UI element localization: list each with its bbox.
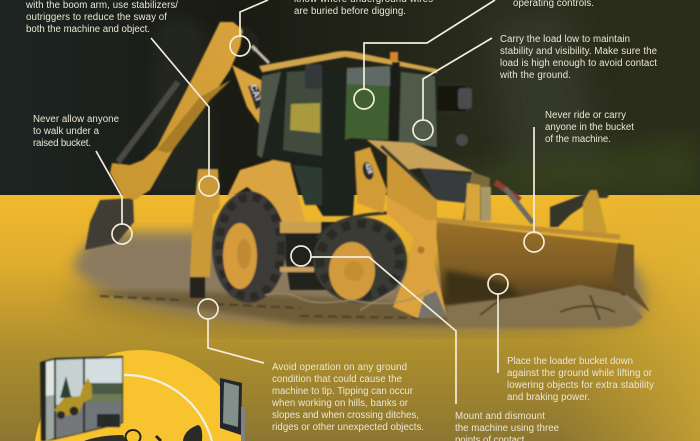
front fender panel <box>355 147 387 213</box>
left cab window <box>283 70 322 156</box>
callout: carry load low: load is high enough to avoid contact <box>500 58 657 69</box>
simulator screens <box>40 356 123 441</box>
callout: boom arm stabilizers: with the boom arm, use stabilizers/ <box>25 0 178 11</box>
engine hood <box>367 140 475 172</box>
cab body <box>257 70 437 216</box>
callout: underground wires <box>294 0 433 17</box>
simulator lever <box>156 436 161 441</box>
model badge: 428 <box>363 162 374 175</box>
cab roof <box>259 51 437 73</box>
callout: loader bucket down: Place the loader bucket down <box>507 356 633 367</box>
model badge <box>361 161 375 181</box>
callout: never ride in bucket <box>545 110 634 145</box>
hydraulic ram red <box>495 182 520 200</box>
front fender arc <box>317 213 387 238</box>
side panel <box>387 153 437 240</box>
callout: avoid tipping <box>271 362 424 433</box>
simulator steering wheel <box>126 430 140 441</box>
bucket shadow <box>445 270 520 305</box>
middle screen <box>56 359 83 438</box>
callout: loader bucket down: lowering objects for extra stability <box>507 380 654 391</box>
dark background band <box>414 0 700 195</box>
callout: never ride in bucket: of the machine. <box>545 134 611 145</box>
callout markers <box>112 36 544 319</box>
door lower window <box>293 165 322 205</box>
callout: never ride in bucket: Never ride or carry <box>545 110 626 121</box>
front tire <box>313 217 407 303</box>
simulator side monitor <box>220 378 245 441</box>
simulator console <box>84 435 126 441</box>
callout: never ride in bucket: anyone in the bucket <box>545 122 634 133</box>
callout: underground wires: are buried before digging. <box>294 6 406 17</box>
backhoe loader <box>85 22 650 326</box>
CAT mark: CAT <box>248 83 264 104</box>
grille <box>420 168 472 203</box>
ground and dust patch <box>70 232 650 332</box>
right cab window <box>399 72 437 147</box>
rear bucket <box>85 198 134 250</box>
callout: carry load low: with the ground. <box>499 70 571 81</box>
callout: avoid tipping: slopes and when crossing ditches, <box>272 410 419 421</box>
chassis <box>280 222 345 290</box>
rear fender <box>227 160 305 222</box>
callout: avoid tipping: machine to tip. Tipping can occur <box>272 386 414 397</box>
bucket right side <box>612 243 650 312</box>
callout: three points of contact <box>455 411 559 441</box>
beacon <box>390 52 398 61</box>
left cab pillar <box>257 72 281 158</box>
callout: raised bucket: Never allow anyone <box>33 114 119 125</box>
callout: loader bucket down: against the ground while lifting or <box>507 368 653 379</box>
front hub <box>329 242 375 300</box>
left screen <box>46 360 54 441</box>
callout: raised bucket: to walk under a <box>33 126 100 137</box>
rear tire <box>212 191 286 303</box>
backhoe boom <box>110 22 243 200</box>
loader bucket <box>435 222 634 305</box>
callout: avoid tipping: condition that could cause the <box>272 374 402 385</box>
callout: avoid tipping: ridges or other unexpected objects. <box>272 422 424 433</box>
screen frame <box>40 356 123 441</box>
callout: three points of contact: Mount and dismount <box>455 411 545 422</box>
branches on ground <box>265 290 430 310</box>
loader bracket left <box>465 183 480 222</box>
bucket top bar <box>436 220 620 237</box>
boom underside <box>157 80 231 153</box>
rear hub <box>223 223 257 289</box>
callout: loader bucket down <box>507 356 654 403</box>
callout: carry load low <box>499 34 657 81</box>
loader arm <box>387 197 447 318</box>
simulator spotlight <box>34 350 246 441</box>
callout: avoid tipping: when working on hills, banks or <box>271 398 409 409</box>
callout: raised bucket: raised bucket. <box>33 138 91 149</box>
callout: boom arm stabilizers: both the machine and object. <box>26 24 150 35</box>
callout: carry load low: Carry the load low to maintain <box>500 34 630 45</box>
callout: boom arm stabilizers <box>25 0 178 35</box>
right bracket <box>583 190 607 233</box>
hydraulic ram <box>118 82 178 162</box>
pivot <box>418 246 424 254</box>
yellow background band <box>0 195 700 441</box>
callout: avoid tipping: Avoid operation on any ground <box>272 362 407 373</box>
simulator seat <box>183 425 202 441</box>
dark bracket arm <box>550 193 610 227</box>
right screen <box>85 358 122 431</box>
swing frame arm <box>232 65 267 128</box>
dirt pile <box>447 285 643 326</box>
callout: raised bucket <box>33 114 119 149</box>
chassis steps <box>280 222 321 233</box>
boom knuckle <box>240 26 259 58</box>
dark pillar <box>390 62 400 144</box>
callout: boom arm stabilizers: outriggers to reduce the sway of <box>26 12 167 23</box>
centre cab window <box>345 66 390 140</box>
right mirror and lamp <box>438 85 472 146</box>
on-screen machine <box>54 378 92 416</box>
cab mirror <box>305 64 322 89</box>
stabilizer leg <box>190 169 220 277</box>
callout: three points of contact: the machine using three <box>455 423 559 434</box>
callout: carry load low: stability and visibility. Make sure the <box>500 46 657 57</box>
simulator arc <box>124 375 212 441</box>
callout leader lines <box>96 0 534 404</box>
callout: loader bucket down: and braking power. <box>507 392 590 403</box>
